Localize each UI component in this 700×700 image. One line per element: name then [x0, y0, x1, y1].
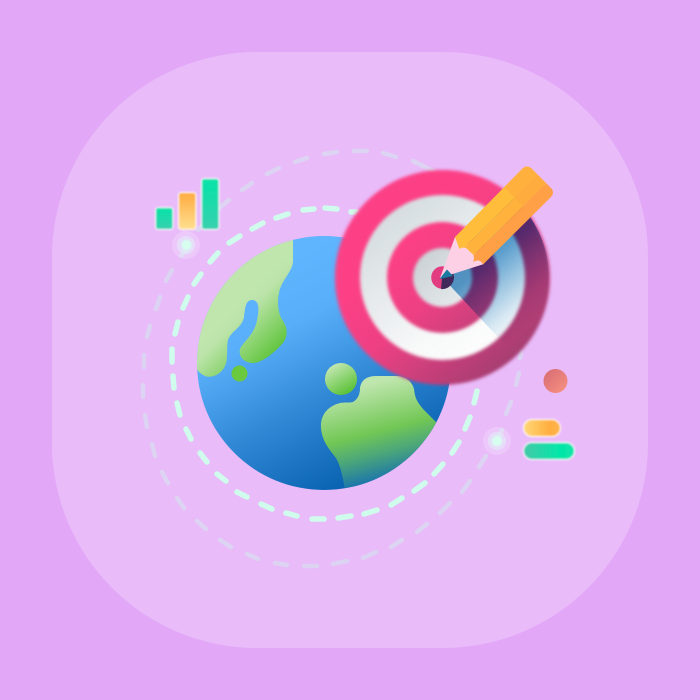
pencil wood tip — [440, 237, 484, 278]
bullseye — [431, 266, 454, 289]
pencil shadow wedge — [450, 198, 549, 340]
ring: outer pink — [335, 170, 550, 385]
bullseye shadow — [441, 271, 454, 289]
target grain — [340, 174, 540, 382]
orange pill — [524, 420, 560, 436]
bar chart icon — [156, 178, 219, 230]
pencil body — [455, 166, 553, 264]
green pill — [524, 442, 574, 460]
node glow: left — [172, 231, 200, 259]
inner dashed orbit — [172, 208, 477, 519]
island: small — [232, 366, 248, 382]
globe — [190, 232, 451, 500]
target — [332, 168, 552, 388]
panel: rounded backdrop — [52, 52, 648, 648]
node glow: right — [483, 427, 511, 455]
continent: upper left — [197, 240, 293, 377]
outer dashed orbit — [143, 151, 521, 566]
pencil lead — [440, 270, 453, 279]
red dot — [544, 369, 568, 393]
continent: lower right — [320, 376, 436, 488]
island: round — [325, 363, 357, 395]
ring: grey — [413, 248, 472, 307]
pencil — [440, 166, 553, 279]
ring: inner pink — [387, 222, 498, 333]
ring: white — [360, 195, 525, 360]
